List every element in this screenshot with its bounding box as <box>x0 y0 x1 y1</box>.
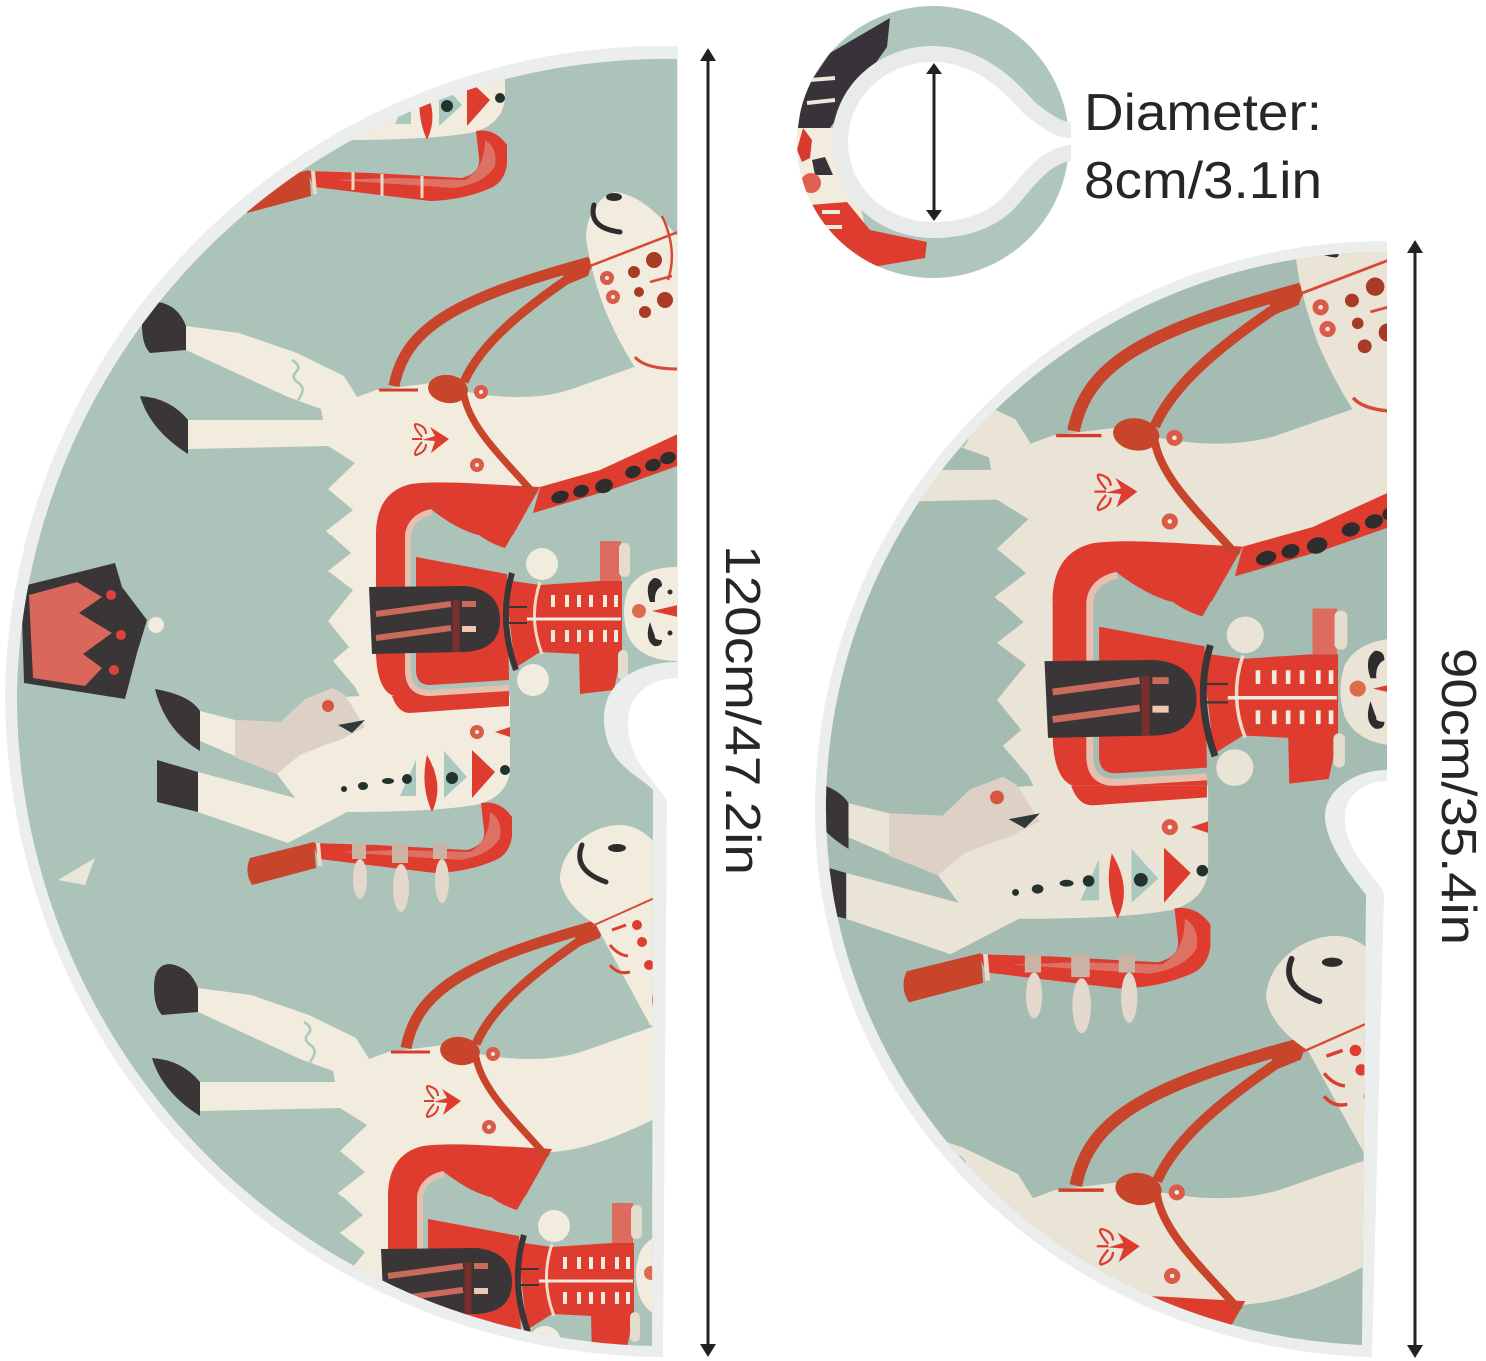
skirt fabric with horse and nutcracker pattern <box>826 252 1387 1345</box>
arrow: 120cm height <box>700 48 716 1357</box>
arrow: 90cm height <box>1407 240 1423 1358</box>
ring inner opening with border <box>848 62 1085 222</box>
crown <box>22 563 164 699</box>
panel: large 120cm tree skirt <box>0 16 692 1360</box>
label: 120cm/47.2in: 120cm/47.2in <box>715 545 769 875</box>
arrow: ring diameter <box>926 63 942 221</box>
label: diameter <box>1084 84 1322 210</box>
horse and nutcracker rider <box>826 252 1387 1034</box>
small ear detail <box>58 858 95 885</box>
label: diameter: 8cm/3.1in <box>1084 152 1322 210</box>
label: diameter: Diameter: <box>1084 84 1322 142</box>
gap mask <box>1071 100 1101 190</box>
skirt fabric with horse and nutcracker pattern <box>0 16 692 1360</box>
label: 90cm/35.4in: 90cm/35.4in <box>1431 648 1485 945</box>
horse and nutcracker rider <box>140 192 680 912</box>
lower horse and nutcracker rider <box>947 936 1366 1325</box>
panel: small 90cm tree skirt <box>815 241 1387 1357</box>
ring fabric <box>797 6 1069 278</box>
skirt border <box>5 46 678 1357</box>
skirt border <box>815 241 1387 1357</box>
partial horse at top <box>246 80 507 213</box>
lower horse and nutcracker rider <box>152 825 692 1359</box>
panel: centre ring detail <box>797 6 1101 278</box>
